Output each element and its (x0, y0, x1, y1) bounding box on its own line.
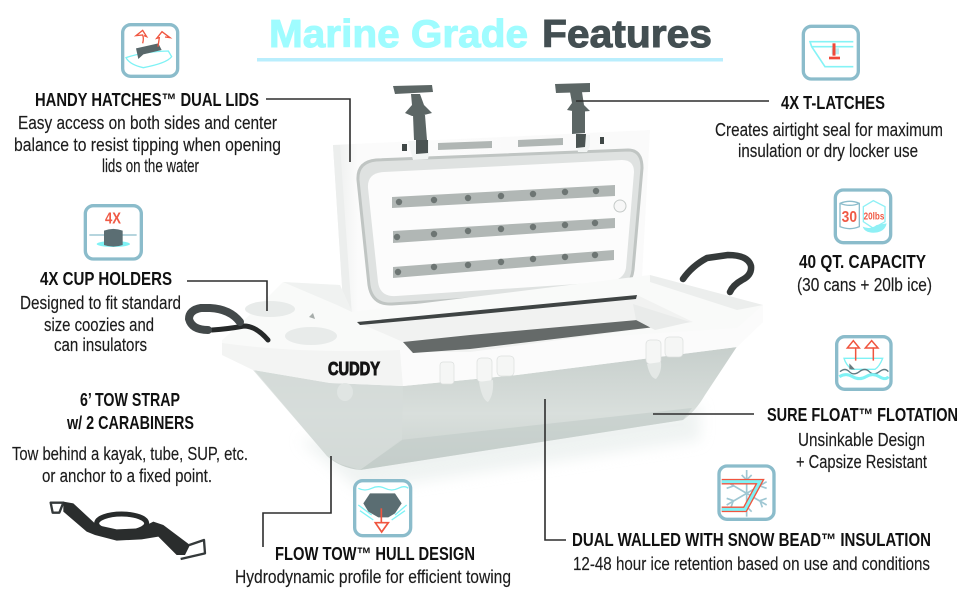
slots (438, 141, 492, 150)
title: Features (542, 13, 712, 56)
icon: strap photo (51, 502, 205, 559)
panel: sure float: Unsinkable Design (798, 430, 925, 450)
panel: capacity: 40 QT. CAPACITY (799, 252, 926, 272)
panel: cup holders: 4X CUP HOLDERS (40, 269, 172, 289)
panel: handy hatches: balance to resist tipping when opening (14, 135, 281, 155)
title (257, 13, 723, 62)
icon: cans and ice: 20lbs (864, 211, 885, 222)
icon: float (837, 337, 891, 389)
lid (333, 130, 650, 318)
panel: flow tow hull (235, 481, 511, 587)
icon: t-latch (803, 26, 858, 79)
panel: tow strap: w/ 2 CARABINERS (66, 413, 194, 433)
cooler illustration (189, 83, 763, 490)
icon: cup holder (85, 206, 141, 259)
icon: hatches (123, 25, 178, 76)
left handle (189, 308, 268, 340)
panel: cup holders (20, 206, 181, 355)
icon: hull (355, 481, 411, 536)
right handle (683, 255, 751, 292)
panel: snow bead insulation (572, 466, 931, 574)
panel: sure float (767, 337, 958, 472)
panel: handy hatches: lids on the water (102, 156, 199, 176)
ground shadow (300, 405, 700, 490)
ribs (392, 185, 615, 278)
panel: tow strap (12, 390, 248, 559)
cup holders (245, 301, 295, 317)
panel: capacity (797, 190, 932, 295)
deck (222, 275, 763, 386)
leader lines (187, 99, 769, 547)
panel: flow tow hull: Hydrodynamic profile for efficient towing (235, 567, 511, 587)
lid gasket panel (358, 150, 642, 304)
panel: cup holders: Designed to fit standard (20, 293, 181, 313)
panel: t-latches: insulation or dry locker use (738, 141, 918, 161)
panel: handy hatches: HANDY HATCHES™ DUAL LIDS (35, 90, 259, 110)
CUDDY logo: CUDDY (328, 359, 380, 379)
panel: tow strap: Tow behind a kayak, tube, SUP, etc. (12, 444, 248, 464)
panel: cup holders: can insulators (54, 335, 147, 355)
panel: handy hatches: Easy access on both sides and center (18, 113, 277, 133)
icon: cup holder: 4X (105, 210, 121, 227)
title: Marine Grade (269, 13, 528, 56)
panel: tow strap: 6’ TOW STRAP (80, 390, 180, 410)
panel: sure float: + Capsize Resistant (796, 452, 927, 472)
panel: tow strap: or anchor to a fixed point. (42, 466, 212, 486)
icon: cans and ice: 30 (842, 209, 857, 226)
icon: snowflake (719, 466, 774, 519)
panel: handy hatches (14, 25, 281, 176)
hull (250, 345, 738, 470)
panel: t-latches (715, 26, 943, 161)
front clips (440, 337, 683, 384)
panel: cup holders: size coozies and (44, 315, 154, 335)
T-latches (393, 83, 590, 140)
panel: t-latches: 4X T-LATCHES (781, 93, 885, 113)
basin (357, 295, 693, 352)
panel: flow tow hull: FLOW TOW™ HULL DESIGN (275, 544, 475, 564)
panel: capacity: (30 cans + 20lb ice) (797, 275, 932, 295)
icon: cans and ice (835, 190, 891, 243)
